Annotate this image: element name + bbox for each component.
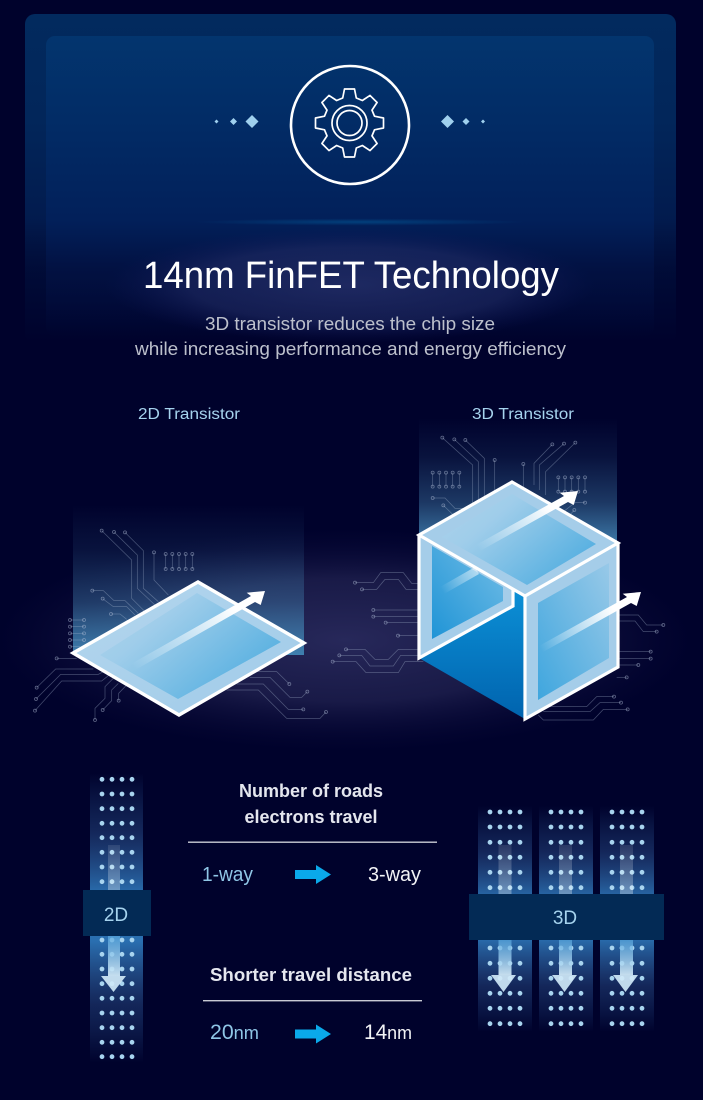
2D plate outline	[73, 582, 304, 715]
heading: number of roads: electrons travel	[244, 807, 378, 827]
icon: left diamonds	[214, 115, 258, 128]
label: 2D Transistor: 2D Transistor	[138, 406, 240, 423]
ambient glow behind diagrams	[0, 528, 695, 752]
2D dots	[102, 779, 133, 1057]
heading: number of roads	[239, 781, 383, 827]
3D label: 3D	[553, 908, 577, 929]
heading: shorter travel distance: Shorter travel distance	[210, 965, 412, 985]
icon: right diamonds	[441, 115, 485, 128]
left streak	[440, 567, 479, 594]
3D dots	[490, 812, 643, 1024]
3D top arrow	[476, 491, 578, 551]
3D right arrow	[539, 592, 641, 652]
3D circuit traces	[333, 438, 663, 720]
arrow: distance	[295, 1024, 331, 1044]
subtitle	[134, 314, 566, 359]
3D arrow two	[552, 940, 577, 992]
3D strips	[478, 806, 654, 1032]
heading: number of roads: Number of roads	[239, 781, 383, 801]
cube right face	[525, 543, 618, 719]
2D label: 2D	[104, 905, 128, 926]
2D arrow	[131, 591, 265, 670]
subtitle: while increasing performance and energy efficiency	[134, 339, 566, 359]
2D arrow faint tail	[108, 845, 120, 890]
stat: 1-way: 1-way	[202, 864, 253, 886]
2D plate	[73, 582, 304, 715]
3D arrow three	[613, 940, 638, 992]
header panel	[25, 14, 676, 344]
cube top face	[419, 482, 618, 596]
label: 3D Transistor: 3D Transistor	[472, 406, 574, 423]
2D arrow	[101, 936, 126, 992]
panel: inner header	[46, 36, 654, 336]
2D label	[83, 890, 151, 936]
2D backlight	[73, 505, 304, 655]
2D strip	[90, 773, 143, 1063]
2D circuit traces	[35, 531, 326, 720]
diagram: 3D channels	[469, 806, 664, 1032]
3D arrow tails	[498, 845, 633, 894]
3D label	[469, 894, 664, 940]
title glow	[105, 227, 595, 343]
title: 14nm FinFET Technology	[143, 255, 559, 297]
2D plate window	[100, 593, 281, 699]
icon: gear in circle	[291, 66, 409, 184]
diagram: 2D transistor	[35, 505, 326, 720]
cube outlines	[419, 482, 618, 719]
cube left face	[419, 535, 513, 658]
subtitle: 3D transistor reduces the chip size	[205, 314, 495, 334]
cube dark inner face	[419, 590, 525, 719]
panel: outer header	[25, 14, 676, 344]
diagram: 2D channel	[83, 773, 151, 1063]
divider glow	[195, 218, 525, 226]
arrow: roads	[295, 865, 331, 884]
divider	[188, 842, 437, 843]
divider	[203, 1000, 422, 1001]
3D backlight	[419, 418, 617, 548]
stat: 3-way: 3-way	[368, 864, 421, 886]
diagram: 3D transistor	[333, 418, 663, 720]
stat: 14nm: 14nm	[364, 1021, 412, 1044]
3D arrow one	[491, 940, 516, 992]
stat: 20nm: 20nm	[210, 1021, 259, 1044]
